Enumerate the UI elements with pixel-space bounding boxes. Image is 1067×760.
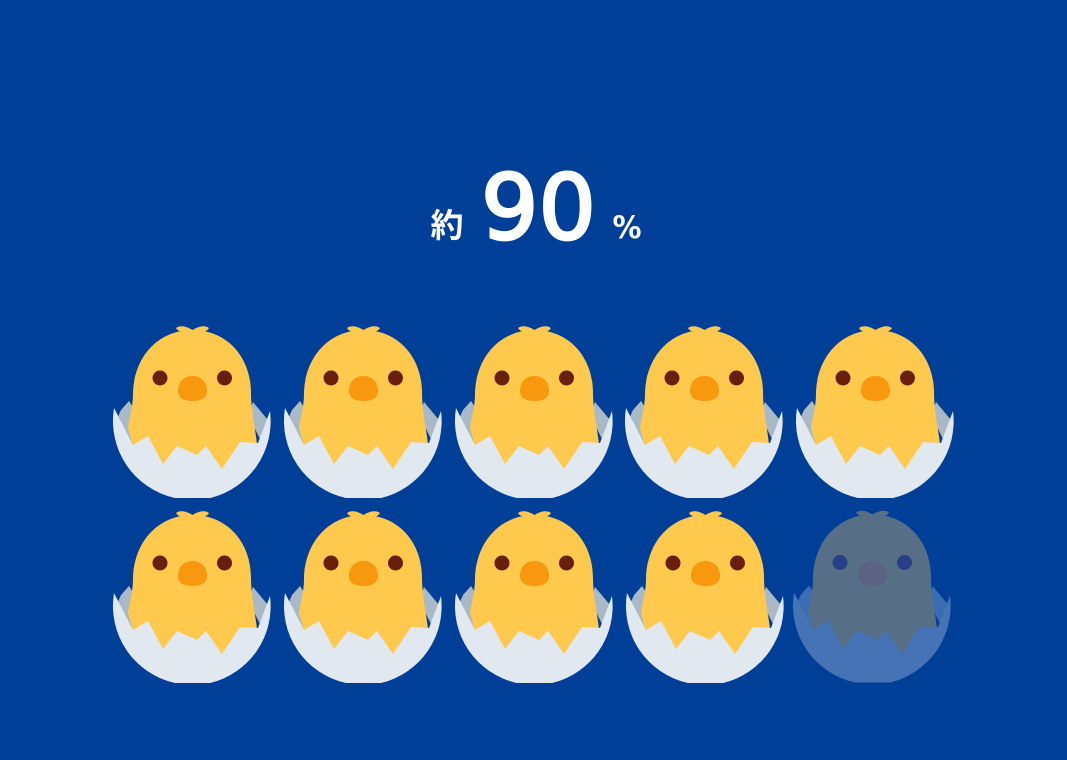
headline: about 90 percent: [430, 156, 642, 260]
icon row 2: four hatched chicks and one dimmed chick: [113, 511, 951, 683]
icon row 1: five hatched chicks: [113, 326, 954, 498]
icon: chick 1: [113, 326, 271, 498]
prefix: about: 約: [430, 207, 464, 244]
icon: chick 9: [626, 511, 784, 683]
icon: chick 7: [284, 511, 442, 683]
icon: chick 4: [625, 326, 783, 498]
icon: chick 5: [796, 326, 954, 498]
icon: chick 6: [113, 511, 271, 683]
icon: chick 2: [284, 326, 442, 498]
value: 90: 90: [481, 156, 596, 260]
icon: chick 3: [455, 326, 613, 498]
unit: percent: %: [612, 210, 642, 246]
icon: dimmed chick 10: [793, 511, 951, 682]
icon: chick 8: [455, 511, 613, 683]
